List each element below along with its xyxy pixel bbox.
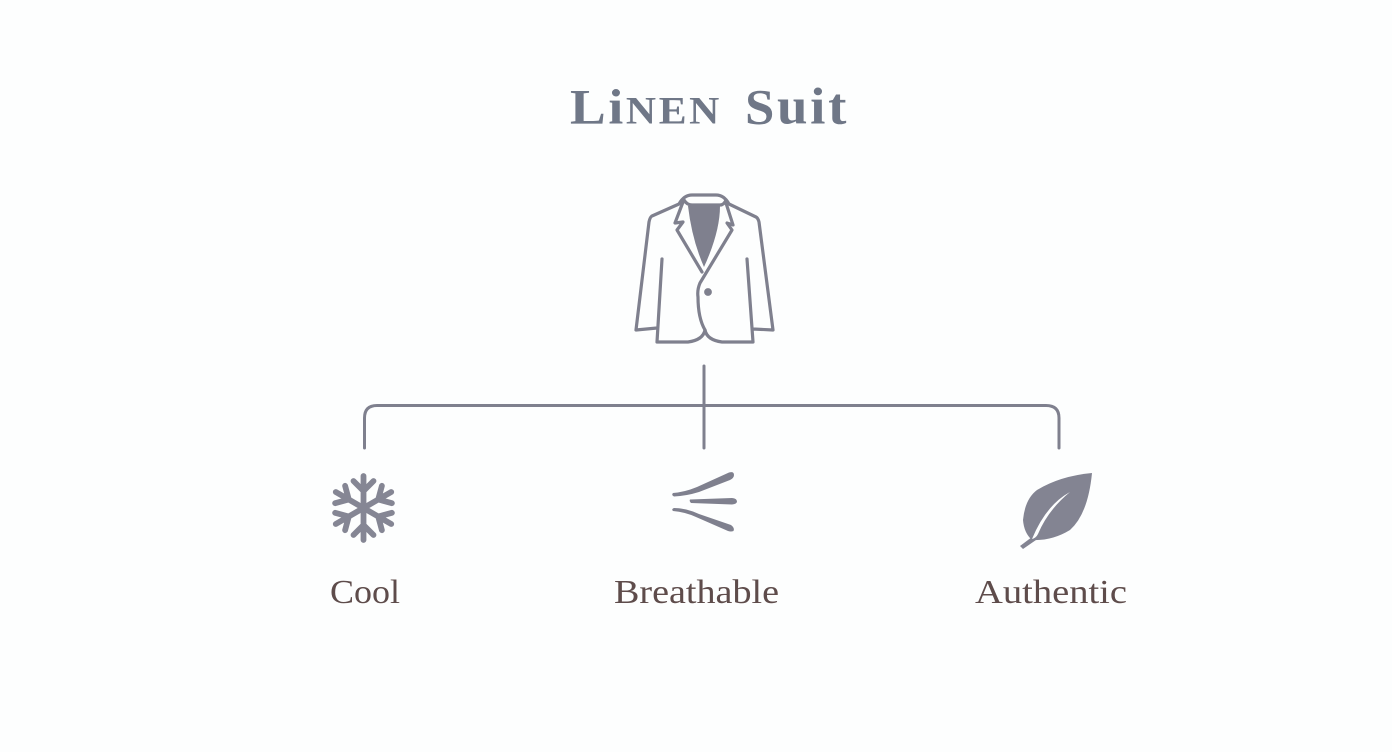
left lapel <box>675 200 726 272</box>
title: Suit <box>745 78 849 136</box>
connector lines <box>364 366 1059 448</box>
label: Breathable: Breathable <box>614 574 779 611</box>
icon: linen suit jacket <box>636 195 773 342</box>
button <box>706 290 710 294</box>
icon: snowflake <box>331 476 396 540</box>
title: LiNEN <box>570 78 722 134</box>
icon: breathable air streams <box>672 472 737 532</box>
label: Cool: Cool <box>330 574 400 611</box>
label: Authentic: Authentic <box>975 574 1127 611</box>
icon: leaf <box>1020 473 1092 549</box>
shirt panel <box>688 204 720 267</box>
right lapel and front edge <box>698 203 733 330</box>
title <box>570 78 849 136</box>
jacket outline <box>636 195 773 342</box>
